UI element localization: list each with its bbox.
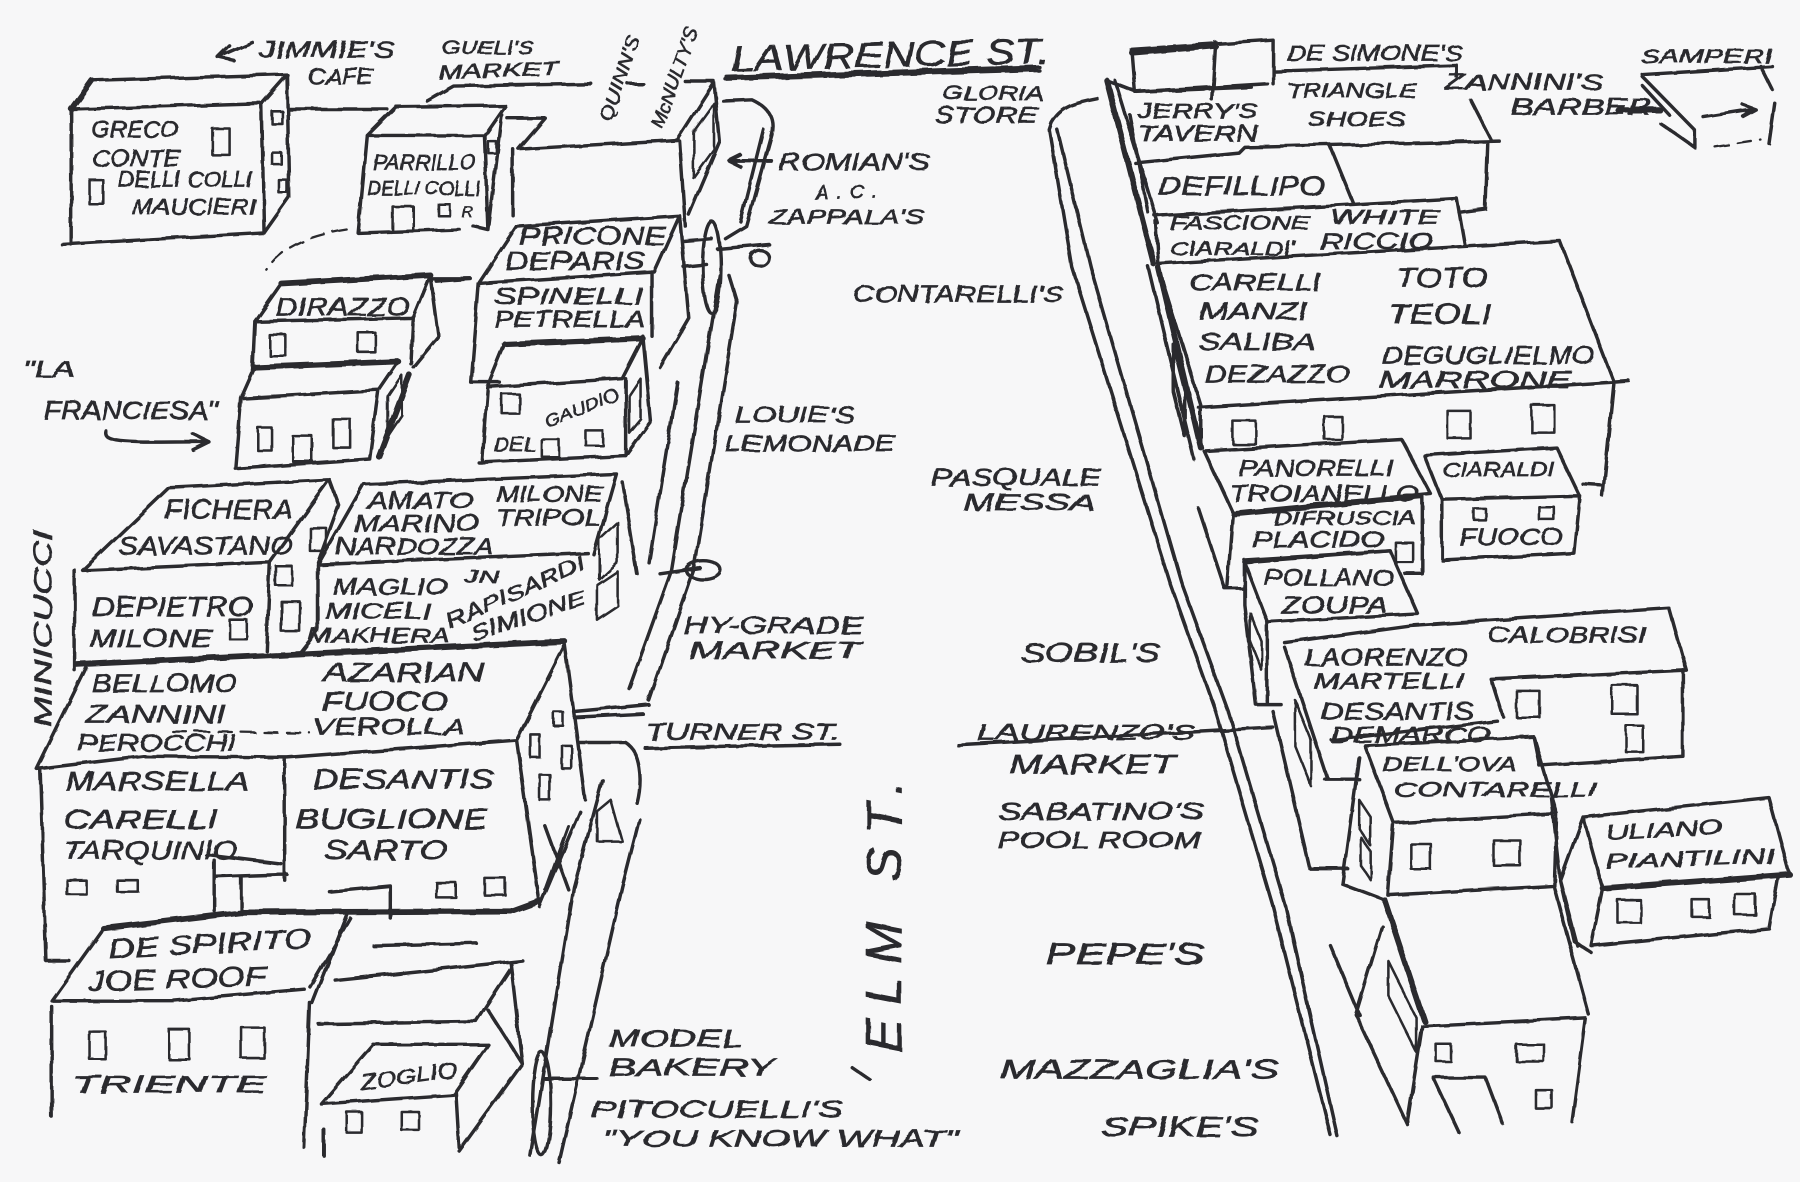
label: Zannini's Barber: BARBER bbox=[1511, 94, 1652, 120]
building: Bellomo block: CARELLI bbox=[63, 805, 219, 835]
building: Pollano Zoupa: POLLANO bbox=[1264, 564, 1394, 590]
label: Gloria Store: GLORIA bbox=[942, 82, 1043, 105]
building: Fichera block: MILONE bbox=[90, 625, 214, 653]
label: Model Bakery: BAKERY bbox=[608, 1054, 778, 1081]
building: Parrillo block: R bbox=[461, 203, 473, 221]
building: Parrillo block bbox=[358, 83, 720, 233]
label: Romian's A.C. Zappala's bbox=[729, 149, 930, 229]
building: Bellomo block: BELLOMO bbox=[92, 670, 238, 698]
building: Bellomo block: DESANTIS bbox=[312, 763, 494, 794]
label: Model Bakery: MODEL bbox=[608, 1026, 743, 1053]
building: Ciaraldi Fuoco: CIARALDI bbox=[1442, 458, 1555, 481]
building: Bellomo block: VEROLLA bbox=[312, 713, 465, 739]
label: Jimmie's Cafe: JIMMIE'S bbox=[258, 36, 396, 62]
label: Louie's Lemonade: LEMONADE bbox=[724, 431, 896, 456]
heading: Turner St.: TURNER ST. bbox=[645, 719, 840, 746]
building: Carelli Toto block: CARELLI bbox=[1189, 269, 1322, 296]
label: Gloria Store: STORE bbox=[934, 102, 1039, 128]
building: Carelli Toto block: TOTO bbox=[1396, 262, 1488, 293]
building: Amato block: SIMIONE bbox=[467, 585, 590, 646]
label: La Franciesa: "LA bbox=[23, 356, 75, 381]
building: Uliano Piantilini: ULIANO bbox=[1605, 816, 1723, 845]
building: Panorelli block: DIFRUSCIA bbox=[1273, 507, 1417, 528]
label: Model Bakery bbox=[608, 1026, 778, 1081]
building: Greco block: GRECO bbox=[92, 117, 178, 144]
label: Quinn's: QUINN'S bbox=[595, 32, 644, 124]
building: Bellomo block: ZANNINI bbox=[85, 701, 226, 729]
building: De Simone's storefront: DE SIMONE'S bbox=[1287, 40, 1463, 66]
building: Greco block bbox=[62, 75, 387, 244]
building: Amato block: RAPISARDI bbox=[443, 552, 589, 633]
building: Bellomo block: MARSELLA bbox=[65, 767, 249, 797]
building: Carelli Toto block: DEGUGLIELMO bbox=[1382, 342, 1595, 370]
building: Amato block: MAKHERA bbox=[308, 625, 450, 648]
building: Amato block: AMATO bbox=[365, 487, 473, 514]
label: Contarelli's: CONTARELLI'S bbox=[853, 281, 1064, 307]
label: Romian's A.C. Zappala's: ROMIAN'S bbox=[778, 149, 930, 176]
building: Del Gaudio bbox=[479, 336, 651, 462]
building: Carelli Toto block: TEOLI bbox=[1388, 299, 1492, 330]
label: Pitocuelli's You Know What: "YOU KNOW WHAT" bbox=[603, 1125, 960, 1151]
label: Hy-Grade Market bbox=[683, 612, 865, 665]
building: Ciaraldi Fuoco: FUOCO bbox=[1459, 524, 1563, 551]
building: Amato block: JN bbox=[463, 567, 500, 587]
label: Spike's: SPIKE'S bbox=[1101, 1111, 1259, 1142]
building: Panorelli block bbox=[1198, 440, 1430, 589]
building: Amato block: MICELI bbox=[325, 599, 430, 624]
label: Louie's Lemonade bbox=[724, 402, 896, 456]
building: De Spirito block: DE SPIRITO bbox=[108, 923, 312, 964]
building: Laurenzo Calobrisi block: CALOBRISI bbox=[1488, 623, 1646, 648]
label: Triangle Shoes bbox=[1287, 80, 1417, 131]
building: Di Razzo: DIRAZZO bbox=[276, 294, 410, 322]
label: Pitocuelli's You Know What bbox=[591, 1097, 960, 1151]
label: Laurenzo's Market: LAURENZO'S bbox=[977, 720, 1196, 745]
label: Sabatino's Pool Room: POOL ROOM bbox=[998, 827, 1202, 853]
building: Bellomo block: PEROCCHI bbox=[77, 730, 236, 756]
building: Carelli Toto block: SALIBA bbox=[1198, 329, 1316, 356]
building: Laurenzo Calobrisi block: DESANTIS bbox=[1321, 699, 1474, 726]
building: Fichera block bbox=[75, 480, 339, 670]
building: De Simone's storefront bbox=[1132, 40, 1463, 100]
building: Amato block bbox=[301, 474, 637, 653]
label: Zannini's Barber: ZANNINI'S bbox=[1444, 70, 1603, 95]
building: Zoglio bbox=[312, 915, 522, 1156]
building: Bellomo block: BUGLIONE bbox=[295, 804, 489, 835]
building: Amato block: MAGLIO bbox=[333, 573, 448, 599]
building: Greco block: DELLI COLLI bbox=[118, 167, 253, 192]
building: De Spirito block bbox=[52, 918, 350, 1148]
label: Pepe's: PEPE'S bbox=[1046, 938, 1204, 971]
building: Panorelli block: PLACIDO bbox=[1252, 526, 1385, 552]
building: Fascione row: CIARALDI' bbox=[1170, 238, 1298, 259]
building: Carelli Toto block bbox=[1148, 241, 1629, 496]
building: Ciaraldi Fuoco bbox=[1425, 448, 1580, 560]
label: Pitocuelli's You Know What: PITOCUELLI'S bbox=[591, 1097, 844, 1124]
building: Amato block: MILONE bbox=[496, 481, 603, 506]
building: Jerry's Tavern row: TAVERN bbox=[1138, 121, 1259, 146]
label: Hy-Grade Market: HY-GRADE bbox=[683, 612, 865, 639]
label: McNulty's: McNULTY'S bbox=[646, 24, 703, 131]
building: Del Gaudio: DEL bbox=[494, 434, 536, 456]
building: Zoglio: ZOGLIO bbox=[358, 1057, 459, 1095]
road: west side of Elm St bbox=[530, 275, 737, 1162]
building: Bellomo block: SARTO bbox=[324, 835, 448, 866]
heading: Turner St. bbox=[645, 719, 840, 748]
building: Carelli Toto block: MANZI bbox=[1198, 298, 1308, 325]
building: Laurenzo Calobrisi block: DEMARCO bbox=[1330, 722, 1491, 747]
building: Dell'Ova Contarelli: DELL'OVA bbox=[1382, 753, 1516, 776]
building: Fascione row: WHITE bbox=[1330, 206, 1440, 229]
building: Amato block: TRIPOLI bbox=[496, 505, 609, 531]
building: Bellomo block: AZARIAN bbox=[321, 658, 486, 688]
label: Jimmie's Cafe: CAFE bbox=[308, 64, 374, 89]
building: Pricone block: DEPARIS bbox=[505, 248, 645, 276]
label: Pasquale Messa bbox=[931, 464, 1102, 517]
building: Fascione row bbox=[1155, 199, 1465, 264]
building: Greco block: CONTE bbox=[92, 145, 181, 172]
building: Fichera block: FICHERA bbox=[164, 495, 293, 525]
building: Pricone block: PRICONE bbox=[519, 222, 667, 250]
building: Pricone block: PETRELLA bbox=[494, 306, 645, 332]
label: Jimmie's Cafe bbox=[218, 36, 396, 89]
label: Zannini's Barber bbox=[1444, 70, 1660, 120]
building: Carelli Toto block: DEZAZZO bbox=[1204, 361, 1350, 388]
label: Mazzaglia's: MAZZAGLIA'S bbox=[1000, 1055, 1279, 1085]
label: Minicucci: MINICUCCI bbox=[30, 530, 58, 728]
label: La Franciesa: FRANCIESA" bbox=[44, 397, 219, 425]
heading: Lawrence St.: LAWRENCE ST. bbox=[730, 31, 1049, 79]
building: Dell'Ova Contarelli: CONTARELLI bbox=[1394, 778, 1597, 801]
building: De Spirito block: TRIENTE bbox=[71, 1071, 268, 1098]
label: Pasquale Messa: PASQUALE bbox=[931, 464, 1102, 491]
Lawrence St curb line bbox=[427, 81, 714, 101]
label: Sobil's: SOBIL'S bbox=[1021, 638, 1161, 668]
label: Gueli's Market bbox=[438, 37, 562, 84]
label: Romian's A.C. Zappala's: A.C. bbox=[814, 182, 878, 204]
building: Jerry's Tavern row: JERRY'S bbox=[1136, 100, 1258, 123]
label: Triangle Shoes: TRIANGLE bbox=[1287, 80, 1417, 103]
building: Amato block: NARDOZZA bbox=[335, 533, 494, 560]
building: Bellomo block: FUOCO bbox=[321, 686, 448, 716]
label: Pasquale Messa: MESSA bbox=[963, 490, 1095, 517]
building: Laurenzo Calobrisi block: MARTELLI bbox=[1313, 669, 1465, 694]
building: Bellomo block bbox=[37, 641, 585, 961]
label: La Franciesa bbox=[23, 356, 219, 450]
label: Laurenzo's Market: MARKET bbox=[1009, 749, 1178, 779]
building: Del Gaudio: GAUDIO bbox=[542, 384, 621, 432]
building: lower-right block bbox=[1330, 888, 1589, 1133]
label: Sabatino's Pool Room bbox=[998, 798, 1204, 853]
building: Carelli Toto block: MARRONE bbox=[1379, 367, 1573, 394]
heading: Elm St.: ELM ST. bbox=[855, 780, 912, 1052]
building: Pricone block: SPINELLI bbox=[494, 283, 644, 309]
building: Pollano Zoupa bbox=[1244, 551, 1418, 705]
building: Jerry's Tavern row bbox=[1107, 80, 1499, 264]
building: Greco block: MAUCIERI bbox=[132, 195, 256, 220]
building: Uliano Piantilini: PIANTILINI bbox=[1605, 845, 1775, 874]
building: Laurenzo Calobrisi block: LAORENZO bbox=[1304, 645, 1469, 672]
label: Gueli's Market: MARKET bbox=[438, 58, 562, 84]
building: De Spirito block: JOE ROOF bbox=[86, 960, 269, 998]
building: La Franciesa bbox=[235, 361, 410, 468]
building: Uliano Piantilini bbox=[1551, 796, 1790, 952]
label: Gueli's Market: GUELI'S bbox=[442, 37, 535, 58]
dashed path from Parrillo bbox=[266, 230, 347, 270]
building: Parrillo block: DELLI COLLI bbox=[367, 177, 480, 200]
building: Fichera block: SAVASTANO bbox=[118, 532, 293, 560]
building: Panorelli block: PANORELLI bbox=[1239, 455, 1394, 481]
label: Gloria Store bbox=[934, 82, 1043, 128]
building: Parrillo block: PARRILLO bbox=[373, 150, 476, 175]
label: Laurenzo's Market bbox=[957, 720, 1273, 779]
building: Di Razzo bbox=[253, 275, 471, 371]
building: Fascione row: RICCIO bbox=[1319, 228, 1434, 254]
label: Romian's A.C. Zappala's: ZAPPALA'S bbox=[768, 206, 926, 229]
label and building: Samperi bbox=[1640, 46, 1775, 147]
road loop near Romian's bbox=[683, 100, 773, 313]
label and building: Samperi: SAMPERI bbox=[1640, 46, 1773, 68]
building: Pollano Zoupa: ZOUPA bbox=[1280, 592, 1388, 618]
label: Sabatino's Pool Room: SABATINO'S bbox=[998, 798, 1204, 825]
building: Pricone block bbox=[430, 216, 689, 382]
building: Laurenzo Calobrisi block bbox=[1273, 608, 1686, 869]
label: Triangle Shoes: SHOES bbox=[1308, 108, 1405, 131]
building: Panorelli block: TROIANELLO bbox=[1229, 480, 1419, 506]
label: Hy-Grade Market: MARKET bbox=[689, 638, 865, 665]
building: Fascione row: FASCIONE bbox=[1170, 213, 1311, 235]
building: Bellomo block: TARQUINIO bbox=[63, 836, 238, 866]
label: Louie's Lemonade: LOUIE'S bbox=[735, 402, 856, 427]
building: Jerry's Tavern row: DEFILLIPO bbox=[1158, 171, 1325, 201]
building: Dell'Ova Contarelli bbox=[1342, 737, 1597, 900]
road: east side of Elm St bbox=[1049, 99, 1337, 1136]
building: Fichera block: DEPIETRO bbox=[92, 591, 253, 622]
building: Amato block: MARINO bbox=[354, 510, 480, 537]
